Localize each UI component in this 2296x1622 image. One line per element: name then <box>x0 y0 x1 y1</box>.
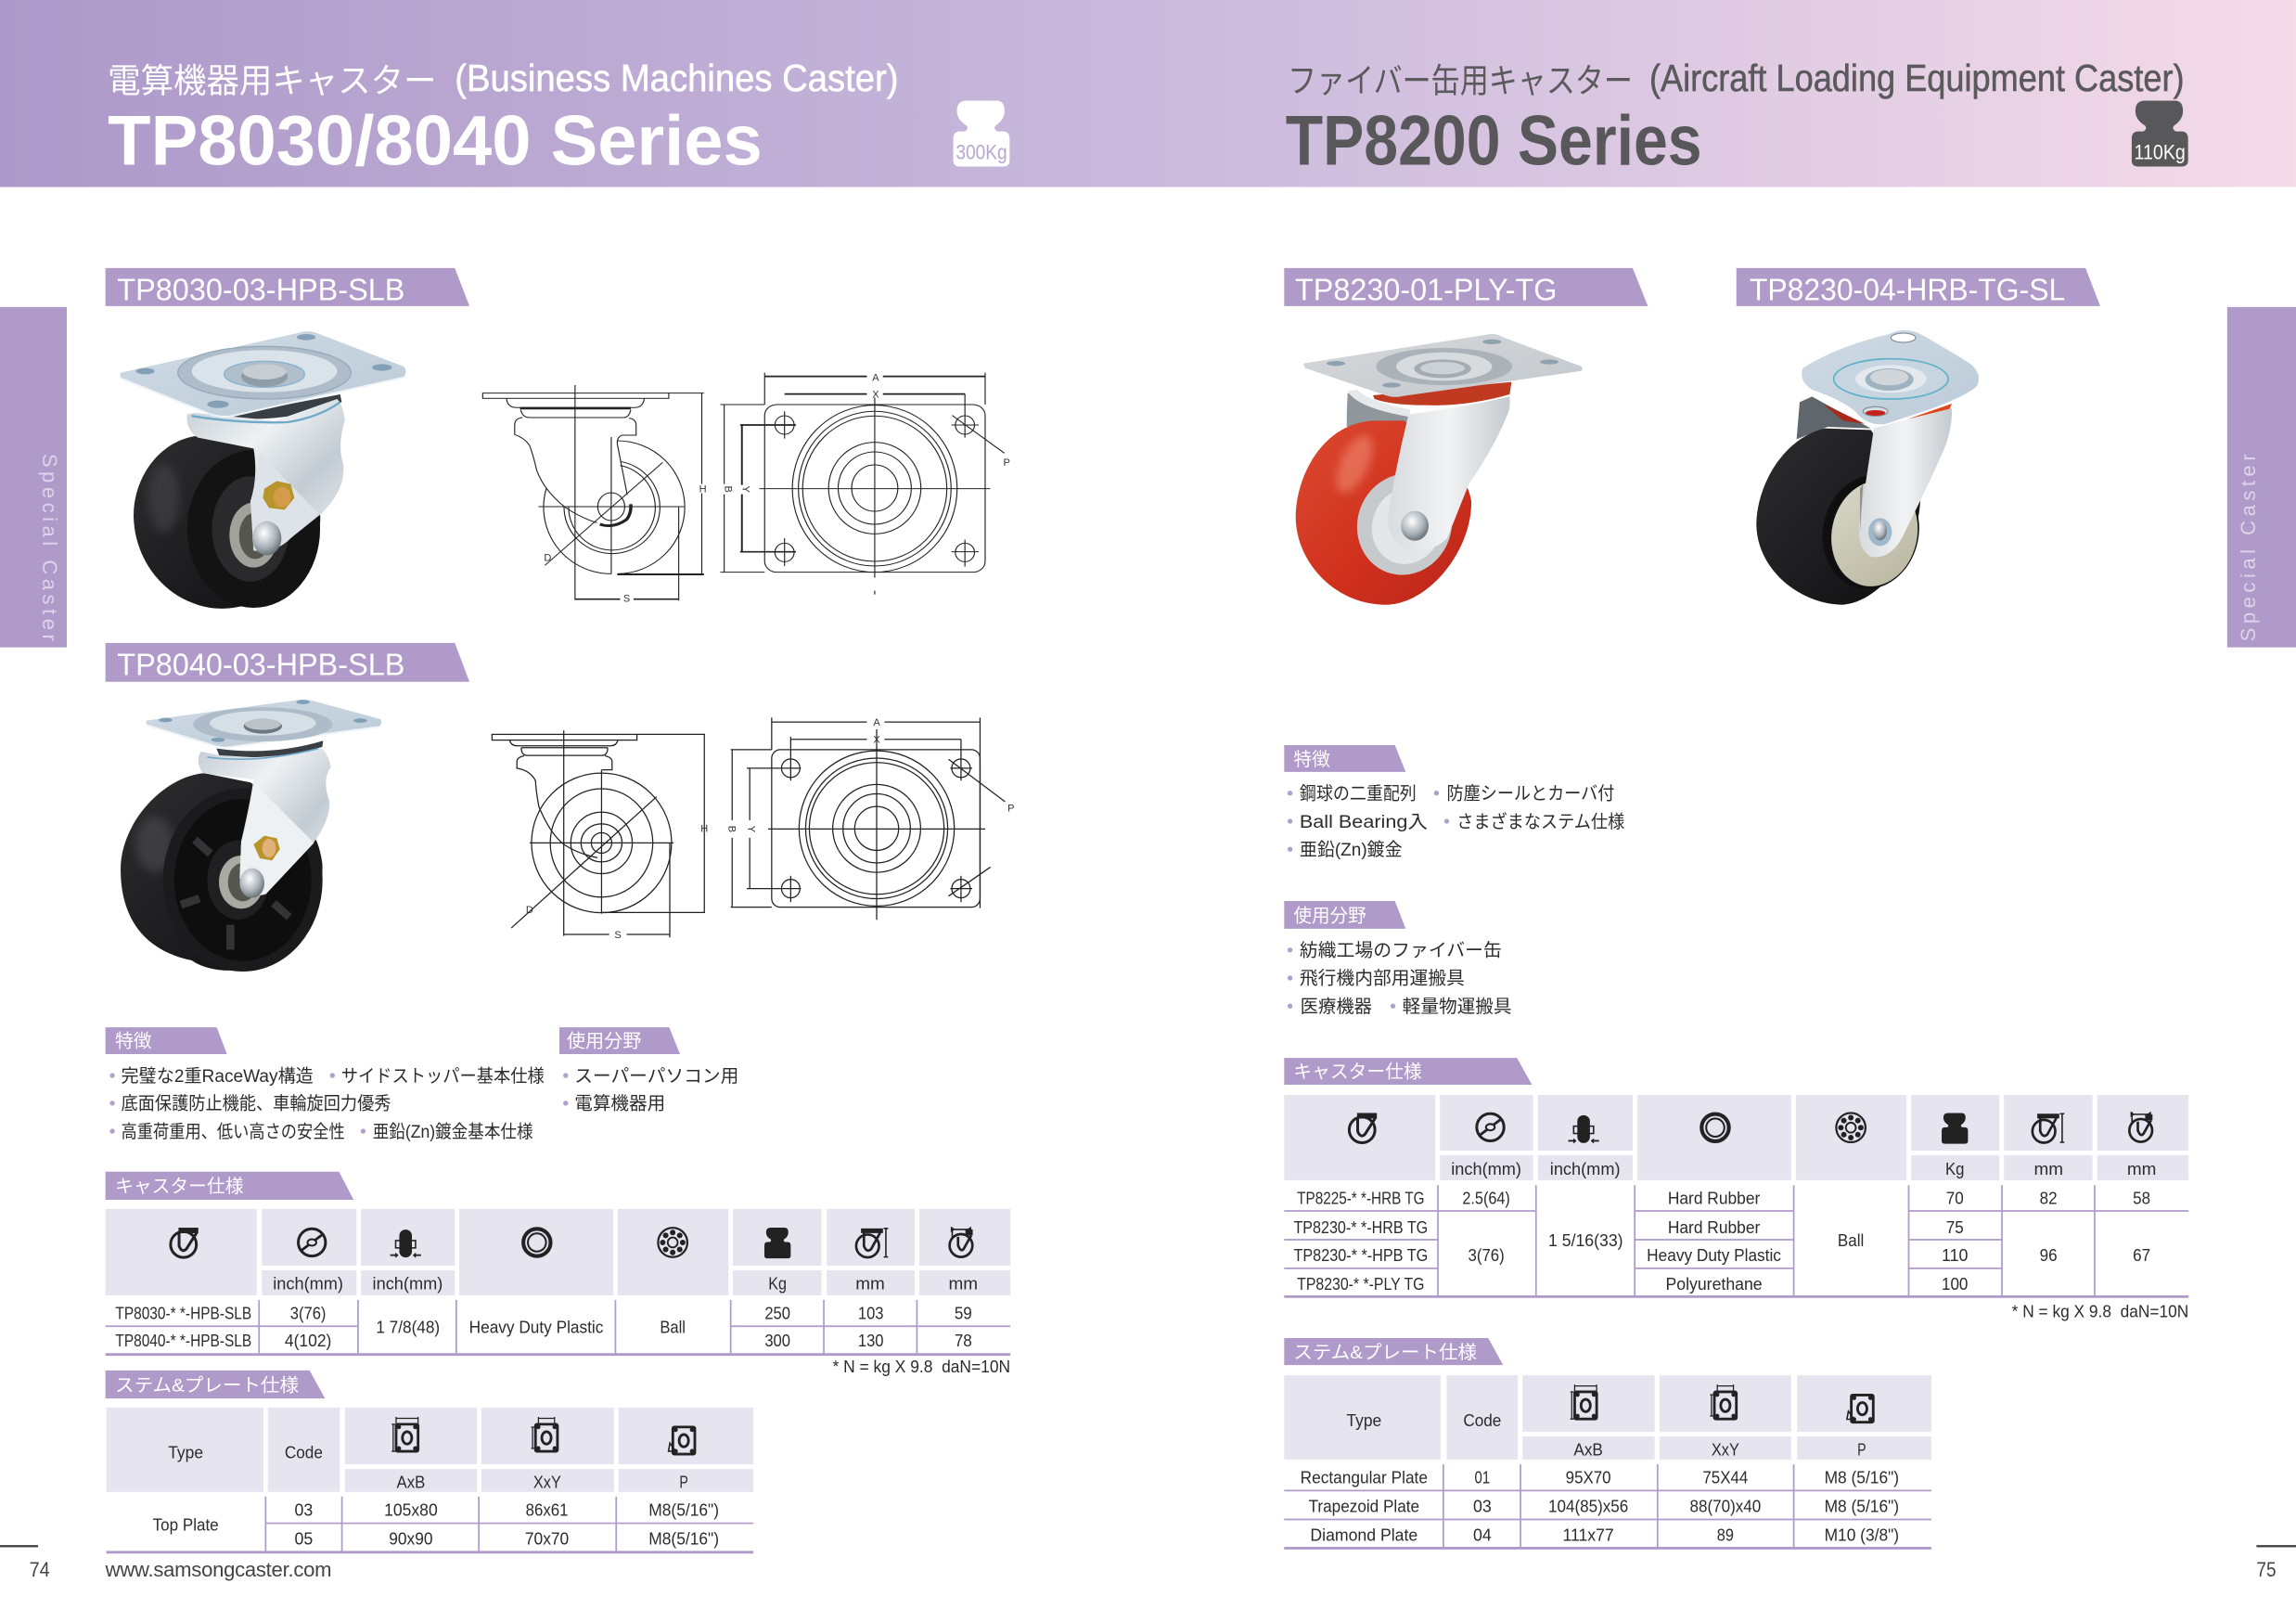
table: TP8200 caster specifications: 96 <box>2040 1246 2058 1265</box>
table: TP8200 plate specifications <box>1284 1375 1931 1548</box>
table: TP8200 plate specifications: M8 (5/16") <box>1825 1497 1899 1515</box>
header band <box>0 0 2296 187</box>
left panel: applications list: 電算機器用 <box>574 1094 665 1114</box>
model tag: TP8230-01-PLY-TG: TP8230-01-PLY-TG <box>1295 274 1558 308</box>
photo: TP8230-04 black caster <box>1756 330 1979 605</box>
table: TP8030/8040 caster specifications: inch(mm) <box>273 1274 343 1293</box>
table: TP8200 plate specifications: P <box>1857 1441 1866 1460</box>
table: TP8200 plate specifications: Rectangular Plate <box>1301 1468 1428 1487</box>
table: TP8200 caster specifications: 67 <box>2133 1246 2150 1265</box>
side tab: right Special Caster: Special Caster <box>2237 454 2260 641</box>
table: TP8030/8040 caster specifications: 78 <box>955 1332 972 1350</box>
technical drawing: TP8030 side and top views: Y <box>739 486 750 494</box>
left panel: stem and plate spec heading: ステム&プレート仕様 <box>115 1376 299 1397</box>
left panel: features list: 底面保護防止機能、車輪旋回力優秀 <box>122 1094 391 1114</box>
table: TP8030/8040 caster specifications: 130 <box>858 1332 884 1350</box>
table: TP8030/8040 plate specifications: 03 <box>295 1500 313 1519</box>
table: TP8200 caster specifications: Hard Rubber <box>1668 1218 1760 1237</box>
technical drawing: TP8030 side and top views: P <box>1004 457 1010 469</box>
table: TP8030/8040 plate specifications: 70x70 <box>525 1529 569 1548</box>
model tag: TP8230-04-HRB-TG-SL: TP8230-04-HRB-TG-SL <box>1750 274 2065 308</box>
table: TP8200 plate specifications: 03 <box>1473 1497 1492 1515</box>
table: TP8030/8040 plate specifications: 90x90 <box>389 1529 433 1548</box>
table: TP8200 caster specifications: 100 <box>1942 1275 1968 1294</box>
left panel: features list <box>109 1066 545 1142</box>
table: TP8030/8040 plate specifications: AxB <box>397 1474 425 1492</box>
note: unit conversion left: * N = kg X 9.8 daN=10N <box>833 1358 1010 1376</box>
table: TP8030/8040 caster specifications: 59 <box>955 1304 972 1322</box>
table: TP8200 plate specifications: 111x77 <box>1563 1525 1614 1544</box>
table: TP8030/8040 caster specifications: 103 <box>858 1304 884 1322</box>
website address: www.samsongcaster.com <box>105 1558 332 1581</box>
model tag: TP8030-03-HPB-SLB <box>106 268 469 308</box>
right panel: applications list: 紡織工場のファイバー缶 <box>1300 941 1502 961</box>
drawing labels: TP8040 dimensions: D <box>526 905 533 916</box>
table: TP8200 caster specifications: 3(76) <box>1469 1246 1505 1265</box>
drawing labels: TP8040 dimensions <box>526 717 1014 941</box>
table: TP8200 plate specifications: 95X70 <box>1566 1468 1611 1487</box>
left panel: stem and plate spec heading <box>106 1371 325 1398</box>
left panel: caster spec heading <box>106 1172 353 1200</box>
left panel: features list: 高重荷重用、低い高さの安全性 <box>122 1122 345 1142</box>
heading: right subtitle: (Aircraft Loading Equipment Caster) <box>1649 57 2185 99</box>
table: TP8200 plate specifications: Trapezoid Plate <box>1309 1497 1419 1515</box>
icon: 110Kg weight <box>2132 100 2188 166</box>
table: TP8200 caster specifications: 75 <box>1946 1218 1964 1237</box>
left panel: features list: サイドストッパー基本仕様 <box>341 1066 545 1087</box>
right panel: caster spec heading <box>1284 1058 1532 1085</box>
heading: left subtitle <box>108 57 899 99</box>
table: TP8030/8040 plate specifications: XxY <box>533 1474 561 1492</box>
table: TP8030/8040 plate specifications: 105x80 <box>384 1500 438 1519</box>
left panel: features heading <box>106 1027 227 1054</box>
table: TP8200 caster specifications <box>1284 1095 2188 1296</box>
right panel: applications list <box>1288 941 1512 1017</box>
table: TP8200 caster specifications: mm <box>2033 1160 2063 1178</box>
table: TP8030/8040 caster specifications: TP8030-* *-HPB-SLB <box>115 1304 251 1322</box>
table: TP8200 plate specifications: Type <box>1346 1411 1381 1430</box>
right panel: applications list: 飛行機内部用運搬具 <box>1300 969 1465 989</box>
table: TP8200 caster specifications: mm <box>2127 1160 2156 1178</box>
right panel: applications heading <box>1284 901 1405 929</box>
table: TP8200 caster specifications: TP8230-* *-PLY TG <box>1297 1275 1425 1294</box>
table: TP8200 plate specifications: 89 <box>1717 1525 1734 1544</box>
table: TP8200 plate specifications: M10 (3/8") <box>1825 1525 1899 1544</box>
right panel: applications heading: 使用分野 <box>1293 906 1366 926</box>
right panel: features heading: 特徴 <box>1293 750 1330 770</box>
technical drawing: TP8030 side and top views: X <box>872 390 879 401</box>
table: TP8030/8040 plate specifications: Type <box>168 1443 203 1461</box>
right panel: stem and plate spec heading: ステム&プレート仕様 <box>1293 1343 1477 1363</box>
side tab: right Special Caster <box>2227 307 2296 648</box>
table: TP8200 caster specifications: Kg <box>1945 1160 1964 1178</box>
technical drawing: TP8030 side and top views: H <box>699 483 707 495</box>
table: TP8030/8040 caster specifications <box>106 1209 1010 1355</box>
table: TP8200 caster specifications: inch(mm) <box>1550 1160 1621 1178</box>
table: TP8030/8040 plate specifications: P <box>679 1474 688 1492</box>
table: TP8200 caster specifications: inch(mm) <box>1451 1160 1521 1178</box>
table: TP8030/8040 caster specifications: 4(102) <box>285 1332 331 1350</box>
table: TP8200 plate specifications: 75X44 <box>1702 1468 1748 1487</box>
table: TP8030/8040 caster specifications: Kg <box>768 1274 787 1293</box>
table: TP8030/8040 plate specifications: M8(5/16") <box>648 1500 719 1519</box>
icon: 300Kg weight: 300Kg <box>956 141 1007 164</box>
table: TP8200 caster specifications: TP8225-* *-HRB TG <box>1297 1189 1425 1207</box>
right panel: features heading <box>1284 745 1405 772</box>
table: TP8030/8040 caster specifications: 1 7/8(48) <box>376 1318 440 1336</box>
table: TP8030/8040 caster specifications: Ball <box>660 1318 686 1336</box>
table: TP8200 plate specifications: Diamond Plate <box>1310 1525 1417 1544</box>
drawing labels: TP8040 dimensions: H <box>700 824 708 835</box>
model tag: TP8040-03-HPB-SLB <box>106 643 469 683</box>
drawing labels: TP8040 dimensions: A <box>873 717 880 728</box>
table: TP8200 caster specifications: 82 <box>2040 1189 2058 1207</box>
table: TP8200 caster specifications: 1 5/16(33) <box>1548 1231 1623 1250</box>
heading: right series title: TP8200 Series <box>1286 102 1702 181</box>
left panel: features list: 亜鉛(Zn)鍍金基本仕様 <box>373 1122 533 1142</box>
table: TP8030/8040 plate specifications: Code <box>285 1443 323 1461</box>
heading: left subtitle: 電算機器用キャスター <box>108 61 437 99</box>
heading: left series title: TP8030/8040 Series <box>108 102 763 181</box>
right panel: features list: 鋼球の二重配列 <box>1300 784 1417 805</box>
icon: 300Kg weight <box>954 100 1009 166</box>
model tag: TP8230-01-PLY-TG <box>1284 268 1648 308</box>
side tab: left Special Caster: Special Caster <box>38 454 61 641</box>
table: TP8200 caster specifications: Heavy Duty Plastic <box>1647 1246 1781 1265</box>
table: TP8200 plate specifications: 01 <box>1475 1468 1490 1487</box>
left panel: applications heading: 使用分野 <box>567 1032 642 1052</box>
drawing labels: TP8040 dimensions: P <box>1007 803 1014 814</box>
table: TP8030/8040 plate specifications: 86x61 <box>526 1500 568 1519</box>
left panel: applications list <box>563 1066 738 1114</box>
table: TP8030/8040 caster specifications: TP8040-* *-HPB-SLB <box>115 1332 251 1350</box>
right panel: applications list: 医療機器 <box>1301 997 1372 1017</box>
left panel: applications heading <box>559 1027 680 1054</box>
right panel: features list: 防塵シールとカーバ付 <box>1446 784 1614 805</box>
right panel: features list: 亜鉛(Zn)鍍金 <box>1300 840 1403 860</box>
note: unit conversion right: * N = kg X 9.8 daN=10N <box>2012 1302 2188 1320</box>
page number 74 <box>0 1545 50 1581</box>
heading: right subtitle <box>1288 57 2185 99</box>
left panel: caster spec heading: キャスター仕様 <box>115 1177 244 1197</box>
page number 75: 75 <box>2256 1558 2277 1581</box>
left panel: applications list: スーパーパソコン用 <box>574 1066 738 1087</box>
table: TP8200 caster specifications: 2.5(64) <box>1462 1189 1510 1207</box>
right panel: applications list: 軽量物運搬具 <box>1403 997 1512 1017</box>
table: TP8200 plate specifications: M8 (5/16") <box>1825 1468 1899 1487</box>
photo: TP8040 caster <box>121 700 381 972</box>
table: TP8030/8040 caster specifications: mm <box>855 1274 885 1293</box>
table: TP8030/8040 plate specifications: 05 <box>295 1529 313 1548</box>
page number 75 <box>2256 1545 2296 1581</box>
left panel: features heading: 特徴 <box>115 1032 152 1052</box>
table: TP8030/8040 caster specifications: Heavy Duty Plastic <box>469 1318 603 1336</box>
table: TP8030/8040 plate specifications <box>107 1408 753 1552</box>
table: TP8200 caster specifications: 58 <box>2133 1189 2150 1207</box>
right panel: caster spec heading: キャスター仕様 <box>1293 1062 1422 1083</box>
table: TP8200 caster specifications: Hard Rubber <box>1668 1189 1760 1207</box>
table: TP8200 plate specifications: 104(85)x56 <box>1548 1497 1628 1515</box>
right panel: stem and plate spec heading <box>1284 1338 1503 1365</box>
right panel: features list: さまざまなステム仕様 <box>1456 811 1624 832</box>
table: TP8200 plate specifications: AxB <box>1573 1441 1603 1460</box>
right panel: features list: Ball Bearing入 <box>1300 812 1428 832</box>
table: TP8030/8040 caster specifications: 3(76) <box>290 1304 326 1322</box>
table: TP8200 caster specifications: 110 <box>1942 1246 1968 1265</box>
technical drawing: TP8030 side and top views: S <box>623 594 630 605</box>
table: TP8030/8040 plate specifications: M8(5/16") <box>648 1529 719 1548</box>
table: TP8200 plate specifications: 04 <box>1473 1525 1492 1544</box>
right panel: features list <box>1288 784 1624 860</box>
table: TP8200 caster specifications: Polyurethane <box>1665 1275 1763 1294</box>
page number 74: 74 <box>30 1558 50 1581</box>
table: TP8200 plate specifications: XxY <box>1712 1441 1739 1460</box>
table: TP8030/8040 plate specifications: Top Plate <box>153 1515 219 1534</box>
table: TP8200 caster specifications: 70 <box>1946 1189 1964 1207</box>
drawing labels: TP8040 dimensions: X <box>873 735 880 746</box>
table: TP8200 caster specifications: Ball <box>1838 1231 1864 1250</box>
technical drawing: TP8030 side and top views <box>482 372 1010 605</box>
heading: right subtitle: ファイバー缶用キャスター <box>1288 61 1633 99</box>
model tag: TP8030-03-HPB-SLB: TP8030-03-HPB-SLB <box>117 274 404 308</box>
table: TP8200 caster specifications: TP8230-* *-HRB TG <box>1293 1218 1428 1237</box>
drawing labels: TP8040 dimensions: S <box>614 930 622 941</box>
technical drawing: TP8040 side and top views <box>492 717 1005 937</box>
table: TP8200 plate specifications: Code <box>1463 1411 1501 1430</box>
photo: TP8030 caster <box>120 331 406 609</box>
heading: left subtitle: (Business Machines Caster) <box>455 57 899 99</box>
drawing labels: TP8040 dimensions: Y <box>746 826 757 833</box>
technical drawing: TP8030 side and top views: A <box>872 372 879 383</box>
table: TP8030/8040 caster specifications: inch(mm) <box>373 1274 443 1293</box>
photo: TP8230-01 red caster <box>1296 334 1583 605</box>
table: TP8200 caster specifications: TP8230-* *-HPB TG <box>1293 1246 1428 1265</box>
table: TP8030/8040 caster specifications: 250 <box>764 1304 790 1322</box>
table: TP8200 plate specifications: 88(70)x40 <box>1690 1497 1761 1515</box>
table: TP8030/8040 caster specifications: 300 <box>764 1332 790 1350</box>
icon: 110Kg weight: 110Kg <box>2135 141 2186 164</box>
technical drawing: TP8030 side and top views: D <box>544 553 551 564</box>
technical drawing: TP8030 side and top views: B <box>722 486 733 493</box>
drawing labels: TP8040 dimensions: B <box>725 826 737 832</box>
table: TP8030/8040 caster specifications: mm <box>949 1274 978 1293</box>
left panel: features list: 完璧な2重RaceWay構造 <box>122 1066 314 1087</box>
side tab: left Special Caster <box>0 307 67 648</box>
model tag: TP8040-03-HPB-SLB: TP8040-03-HPB-SLB <box>117 649 404 683</box>
